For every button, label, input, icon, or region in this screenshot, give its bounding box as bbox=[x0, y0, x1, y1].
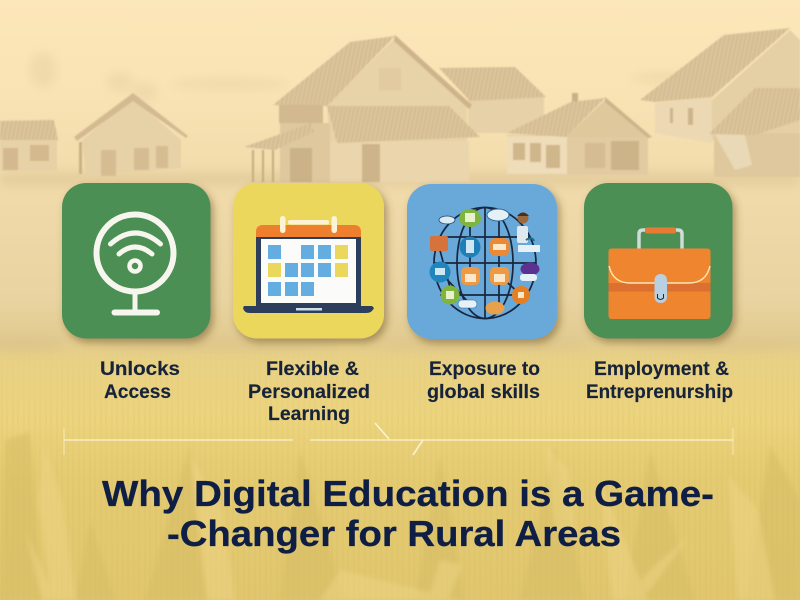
icon: orange briefcase bbox=[608, 228, 710, 319]
label: exposure to global skills: global skills bbox=[427, 382, 540, 403]
label: flexible and personalized learning bbox=[248, 359, 370, 425]
icon: calendar on a laptop bbox=[243, 216, 374, 313]
house: small left bbox=[74, 93, 188, 176]
house: far left bbox=[0, 120, 58, 171]
mid-ground grass patches bbox=[0, 172, 800, 352]
icon: wifi signal on a stand bbox=[96, 214, 174, 312]
house: far right bbox=[640, 28, 800, 177]
label: exposure to global skills: Exposure to bbox=[429, 359, 540, 380]
icon: small person figure bbox=[517, 212, 534, 243]
label: unlocks access: Access bbox=[104, 382, 171, 403]
label: employment and entrepreneurship: Employment & bbox=[594, 359, 729, 380]
label: employment and entrepreneurship bbox=[586, 359, 733, 403]
divider: white line with break and slashes bbox=[64, 423, 733, 455]
label: flexible and personalized learning: Personalized bbox=[248, 382, 370, 403]
panel: global skills card bbox=[407, 184, 557, 339]
distant tree line bbox=[29, 52, 710, 102]
panel: unlocks access card bbox=[62, 183, 210, 338]
label: unlocks access: Unlocks bbox=[100, 359, 180, 380]
panel: employment card bbox=[584, 183, 732, 338]
title: Why Digital Education is a Game- bbox=[102, 473, 714, 514]
label: flexible and personalized learning: Flexible & bbox=[266, 359, 359, 380]
icon: globe with skill bubbles bbox=[430, 207, 540, 319]
title: -Changer for Rural Areas bbox=[167, 513, 621, 554]
field: grass texture bbox=[0, 345, 800, 600]
house: back bbox=[439, 67, 546, 133]
label: exposure to global skills bbox=[427, 359, 540, 403]
label: flexible and personalized learning: Learning bbox=[268, 404, 350, 425]
house: right small bbox=[507, 93, 652, 175]
label: employment and entrepreneurship: Entreprenurship bbox=[586, 382, 733, 403]
label: unlocks access bbox=[100, 359, 180, 403]
panel: flexible learning card bbox=[233, 183, 384, 338]
field: corn leaves bbox=[0, 432, 800, 600]
title bbox=[102, 473, 714, 554]
house: main bbox=[244, 35, 480, 182]
